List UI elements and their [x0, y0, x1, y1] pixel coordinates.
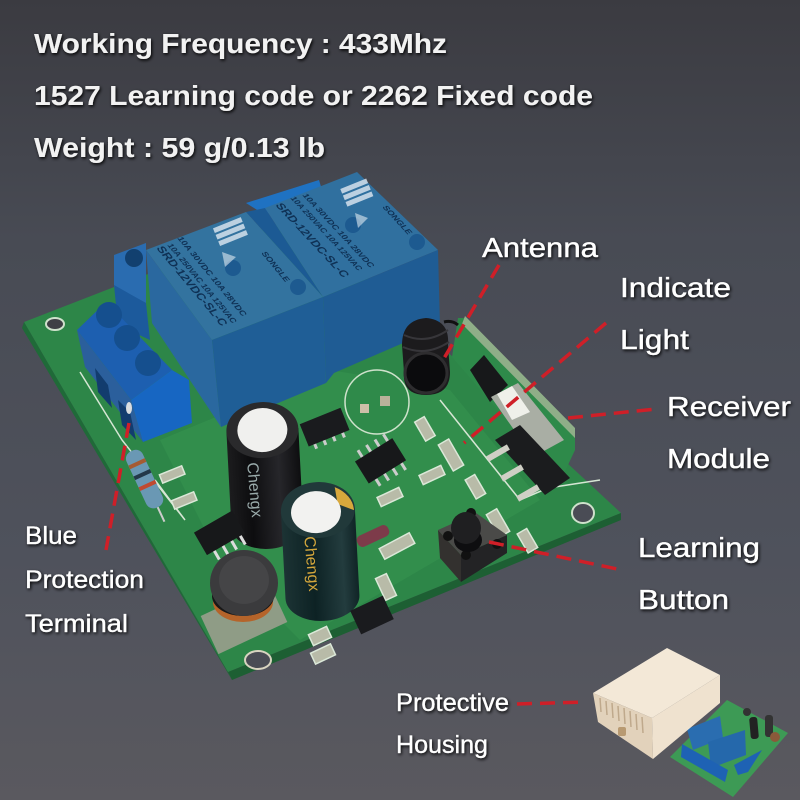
- relay 2: [246, 172, 440, 383]
- leader line: terminal: [106, 423, 129, 550]
- relay 2: 10A 250VAC 10A 125VAC: [288, 195, 365, 272]
- leader line: antenna: [443, 265, 499, 360]
- label: receiver module: Receiver: [667, 391, 791, 422]
- antenna coil: [402, 318, 458, 395]
- inductor: [201, 550, 287, 654]
- capacitor 2: Chengx: [300, 536, 322, 592]
- integrated circuits: [194, 408, 410, 634]
- mini board: [670, 700, 788, 797]
- learning button: [438, 508, 507, 582]
- capacitor 2: [279, 480, 361, 623]
- resistor: [123, 447, 173, 525]
- capacitor 1: Chengx: [243, 462, 265, 518]
- label: receiver module: [667, 391, 791, 474]
- label: learning button: Button: [638, 584, 729, 615]
- label: indicate light: [620, 272, 731, 355]
- heading: specifications: Working Frequency : 433Mhz: [34, 28, 447, 59]
- leader line: receiver module: [568, 409, 656, 418]
- heading: specifications: [34, 28, 593, 163]
- heading: specifications: Weight : 59 g/0.13 lb: [34, 132, 325, 163]
- label: protective housing: Protective: [396, 689, 509, 717]
- label: antenna: Antenna: [482, 232, 598, 263]
- leader line: housing: [517, 702, 585, 704]
- leader line: indicate light: [464, 323, 606, 443]
- relay 1: SONGLE: [259, 250, 292, 284]
- label: blue protection terminal: Blue: [25, 522, 77, 550]
- circuit board photo illustration: [22, 172, 621, 680]
- relay 2: SONGLE: [380, 204, 414, 235]
- relay 1: 10A 30VDC 10A 28VDC: [175, 235, 249, 317]
- diode: [355, 523, 391, 549]
- label: learning button: [638, 532, 760, 615]
- label: blue protection terminal: Terminal: [25, 610, 128, 638]
- relay 1: [146, 212, 326, 427]
- leader line: learning button: [489, 542, 622, 570]
- label: indicate light: Indicate: [620, 272, 731, 303]
- receiver module: [452, 316, 575, 502]
- heading: specifications: 1527 Learning code or 2262 Fixed code: [34, 80, 593, 111]
- blue protection terminal block: [77, 302, 192, 442]
- relay 2: 10A 30VDC 10A 28VDC: [300, 192, 377, 269]
- plastic case: [593, 648, 720, 759]
- label: protective housing: Housing: [396, 731, 488, 759]
- label: indicate light: Light: [620, 324, 689, 355]
- relay 1: 10A 250VAC 10A 125VAC: [165, 242, 239, 324]
- label: blue protection terminal: [25, 522, 144, 638]
- rear terminal block: [114, 180, 322, 340]
- transistor: [350, 596, 394, 634]
- label: learning button: Learning: [638, 532, 760, 563]
- label: blue protection terminal: Protection: [25, 566, 144, 594]
- relay 1: SRD-12VDC-SL-C: [153, 245, 230, 328]
- label: protective housing: [396, 689, 509, 759]
- pcb: [22, 215, 621, 680]
- protective housing photo illustration: [593, 648, 788, 797]
- relay 2: SRD-12VDC-SL-C: [272, 202, 351, 279]
- solder pads: [159, 417, 538, 664]
- capacitor 1: [225, 400, 305, 551]
- label: receiver module: Module: [667, 443, 770, 474]
